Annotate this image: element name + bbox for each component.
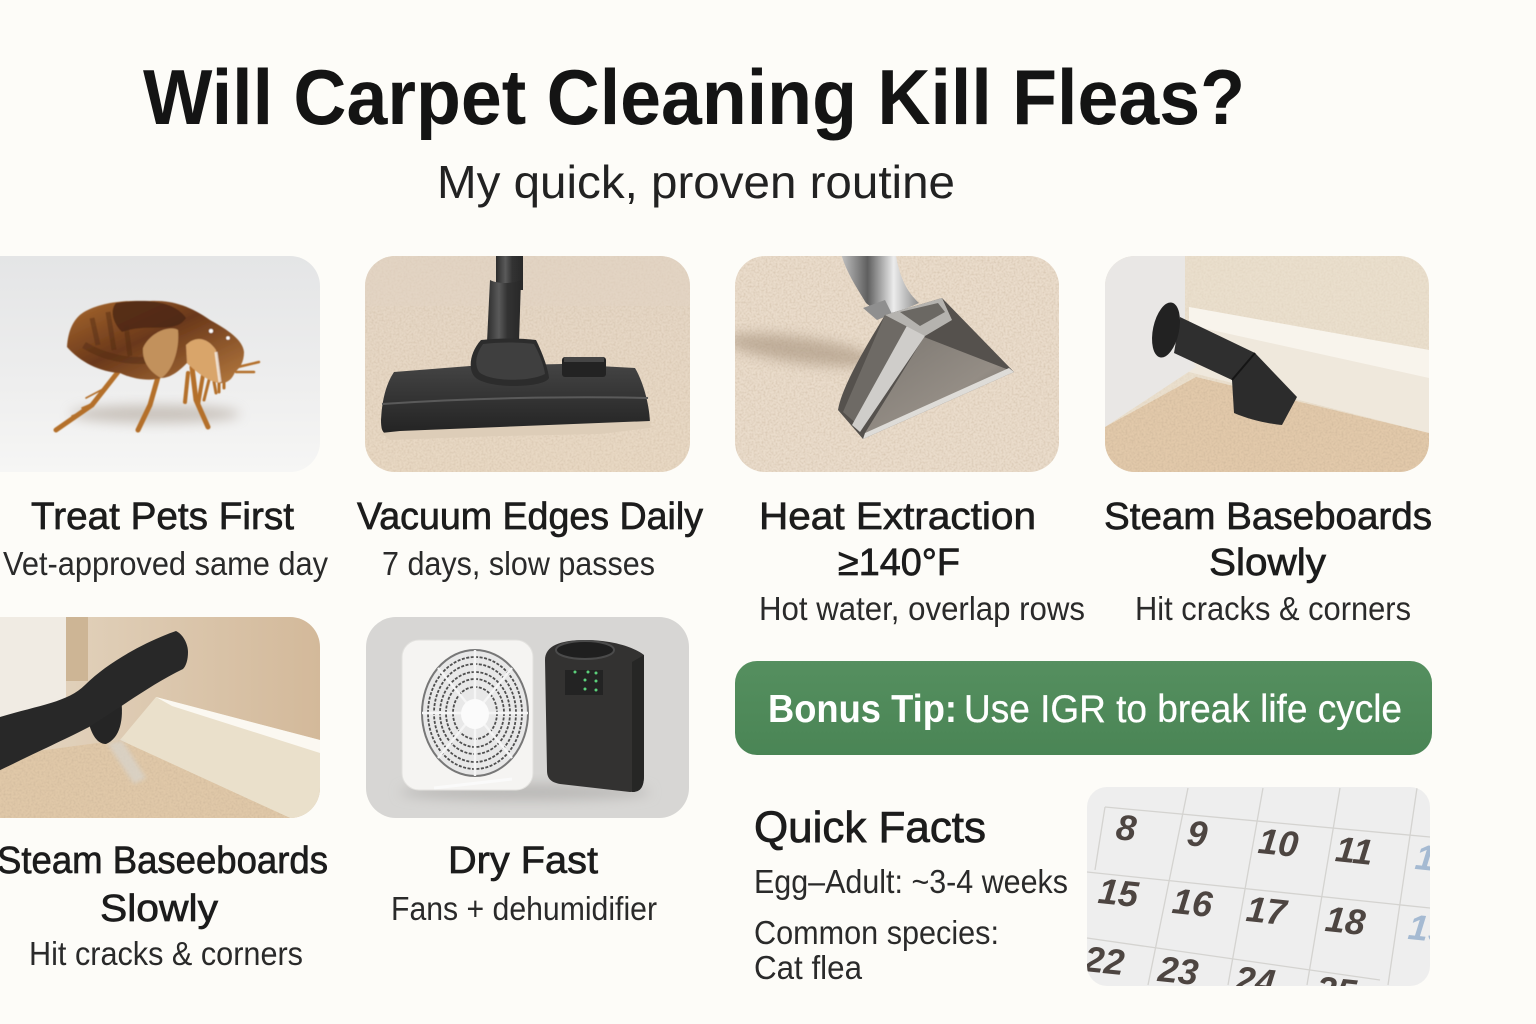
caption: Vet-approved same day — [3, 545, 328, 582]
fact: species: Cat flea — [754, 949, 863, 986]
panel: vacuum edges daily — [357, 250, 703, 582]
caption: Fans + dehumidifier — [391, 890, 657, 927]
heading: Heat Extraction — [759, 496, 1036, 538]
title: Will Carpet Cleaning Kill Fleas? — [143, 53, 1245, 141]
fact: species: Common species: — [754, 914, 999, 951]
photo: calendar — [1087, 787, 1430, 986]
icon: box fan — [402, 640, 533, 790]
heading: Quick Facts — [754, 803, 986, 852]
panel: steam baseeboards slowly, second — [0, 617, 328, 972]
heading: Dry Fast — [448, 840, 598, 882]
callout: bonus tip — [735, 661, 1432, 755]
heading line two: Slowly — [100, 888, 218, 930]
photo: vacuum head on carpet — [365, 250, 690, 472]
photo: calendar: 11 — [1334, 828, 1375, 873]
photo: flea — [0, 256, 320, 472]
photo: calendar: 23 — [1155, 948, 1200, 993]
heading: Treat Pets First — [31, 496, 294, 538]
photo: steam hose along baseboard — [0, 617, 320, 818]
icon: dehumidifier — [545, 640, 644, 792]
photo: calendar: 12 — [1413, 836, 1457, 881]
caption: Hit cracks & corners — [29, 935, 303, 972]
heading: Steam Baseboards — [1104, 496, 1432, 538]
callout: bonus tip: Bonus Tip: — [768, 688, 957, 731]
panel: treat pets first — [0, 256, 328, 582]
panel: steam baseboards slowly — [1104, 256, 1432, 627]
photo: calendar: 15 — [1096, 870, 1141, 915]
photo: calendar: 9 — [1185, 812, 1209, 855]
photo: steel extraction wand — [724, 250, 1059, 472]
photo: calendar: 24 — [1232, 958, 1277, 1003]
heading: Vacuum Edges Daily — [357, 496, 703, 538]
photo: calendar: 10 — [1256, 820, 1300, 865]
panel: quick facts — [754, 803, 1068, 986]
photo: calendar: 16 — [1170, 880, 1215, 925]
panel: heat extraction — [724, 250, 1085, 627]
photo: calendar: 25 — [1313, 968, 1359, 1013]
photo: fan and dehumidifier — [366, 617, 689, 818]
heading line two: Slowly — [1209, 542, 1326, 584]
caption: 7 days, slow passes — [382, 545, 655, 582]
photo: calendar: 22 — [1081, 938, 1126, 983]
photo: calendar: 8 — [1114, 806, 1138, 849]
heading: Steam Baseeboards — [0, 840, 328, 882]
photo: calendar: 19 — [1406, 906, 1450, 951]
caption: Hot water, overlap rows — [759, 590, 1085, 627]
callout: bonus tip: Use IGR to break life cycle — [964, 688, 1402, 731]
heading line two: ≥140°F — [838, 542, 960, 584]
caption: Hit cracks & corners — [1135, 590, 1411, 627]
fact: life cycle: Egg–Adult: ~3-4 weeks — [754, 863, 1068, 900]
photo: calendar: 18 — [1323, 898, 1367, 943]
fact: species — [754, 914, 999, 986]
panel: dry fast — [366, 617, 689, 927]
photo: nozzle at baseboard — [1105, 256, 1429, 472]
subtitle: My quick, proven routine — [437, 156, 955, 208]
photo: calendar: 17 — [1244, 888, 1290, 933]
